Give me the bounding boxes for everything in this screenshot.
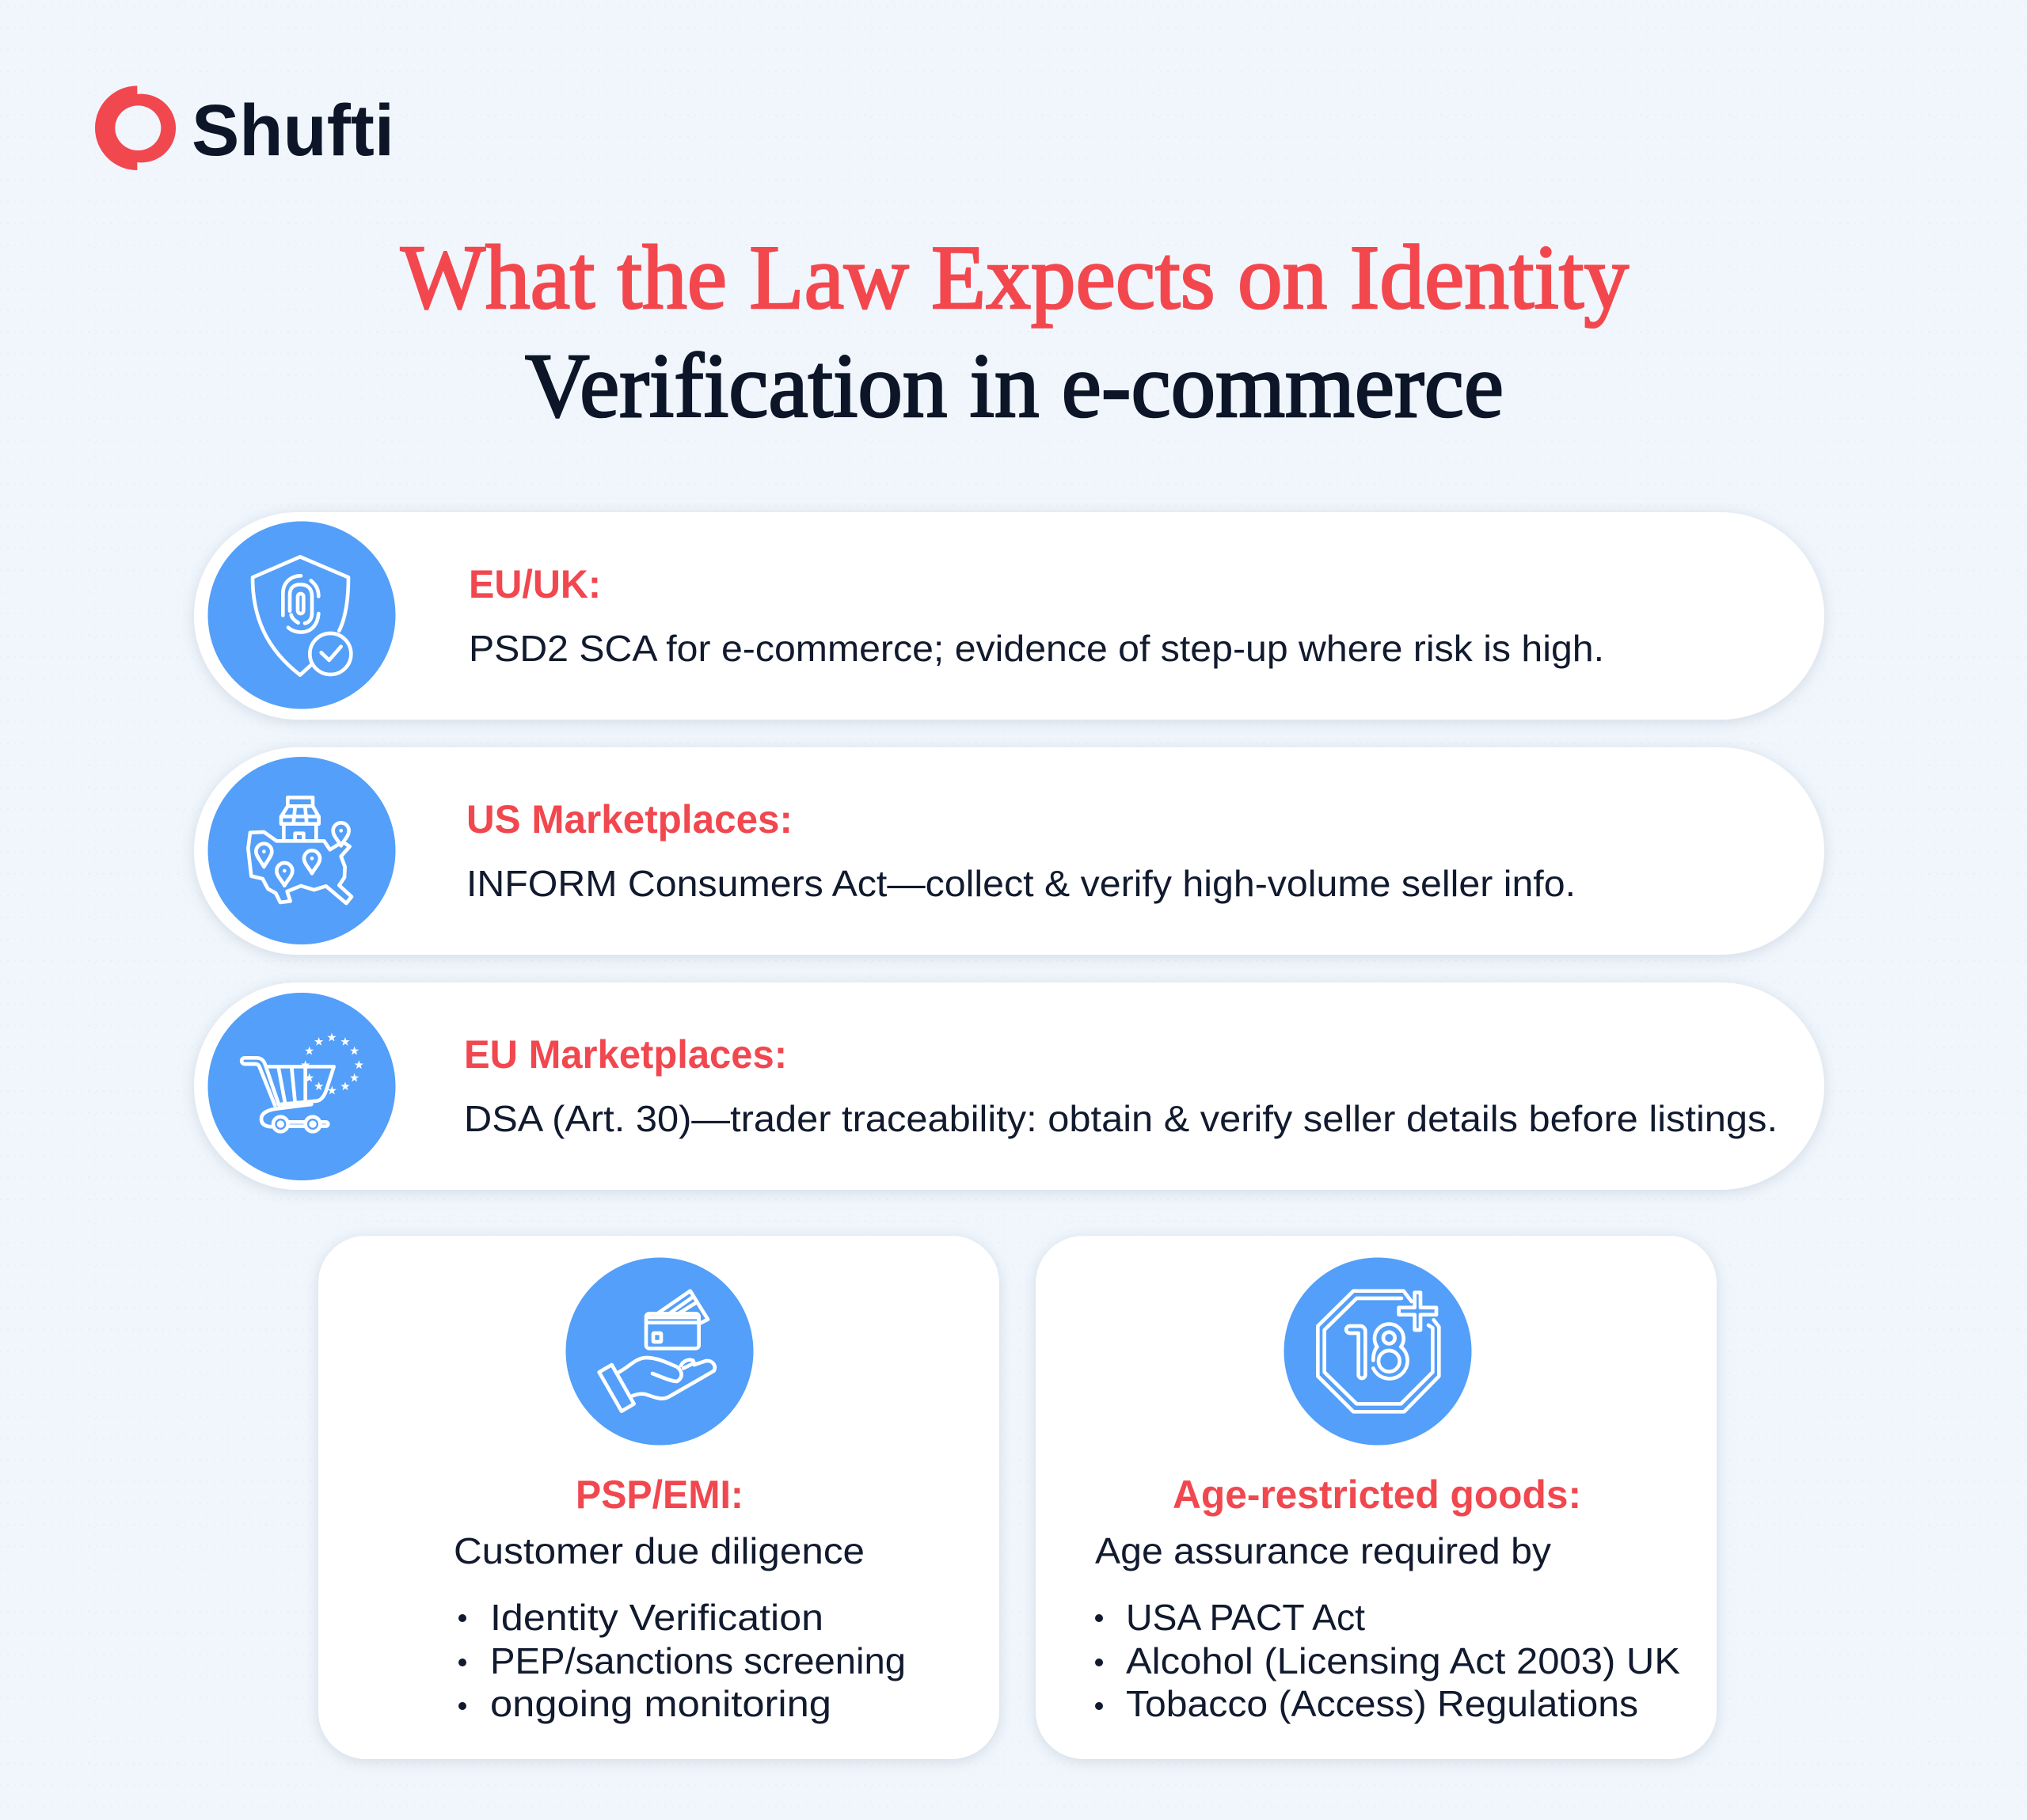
logo: Shufti: Shufti [192,90,394,171]
text: intro: Customer due diligence [454,1530,865,1571]
panel: EU/UK [194,512,1824,720]
heading: EU Marketplaces: EU Marketplaces: [464,1032,787,1077]
list: due diligence items: PEP/sanctions screening [490,1640,906,1681]
icon: hand holding cards [565,1257,754,1446]
icon: shopping cart with EU stars [207,993,396,1180]
heading: Age-restricted goods: Age-restricted goods: [1173,1472,1581,1517]
icon: US map with store [207,757,396,944]
heading: EU/UK: EU/UK: [469,562,601,606]
title: What the Law Expects on Identity [401,227,1629,329]
heading: PSP/EMI: PSP/EMI: [576,1472,743,1517]
text: EU/UK description: PSD2 SCA for e-commerce; evidence of step-up where risk is high. [469,628,1604,669]
list: age assurance laws [1095,1597,1680,1724]
panel: EU Marketplaces [194,982,1824,1190]
text: US Marketplaces description: INFORM Consumers Act—collect & verify high-volume seller info. [466,863,1576,904]
list: due diligence items [458,1597,906,1724]
list: age assurance laws: Alcohol (Licensing Act 2003) UK [1126,1640,1680,1681]
list: due diligence items: Identity Verification [490,1597,823,1638]
icon: shield with fingerprint [207,521,396,709]
list: age assurance laws: USA PACT Act [1126,1597,1365,1638]
panel: US Marketplaces [194,747,1824,955]
heading: US Marketplaces: US Marketplaces: [466,797,793,842]
title: Verification in e-commerce [525,336,1504,437]
text: EU Marketplaces description: DSA (Art. 30)—trader traceability: obtain & verify seller details before listings. [464,1098,1778,1139]
list: due diligence items: ongoing monitoring [490,1683,831,1724]
text: intro: Age assurance required by [1095,1530,1551,1571]
panel: PSP/EMI [318,1236,999,1759]
list: age assurance laws: Tobacco (Access) Regulations [1126,1683,1638,1724]
panel: Age-restricted goods [1036,1236,1717,1759]
title [401,227,1629,437]
icon: 18 plus sign [1284,1257,1471,1446]
logo: Shufti [95,85,394,171]
